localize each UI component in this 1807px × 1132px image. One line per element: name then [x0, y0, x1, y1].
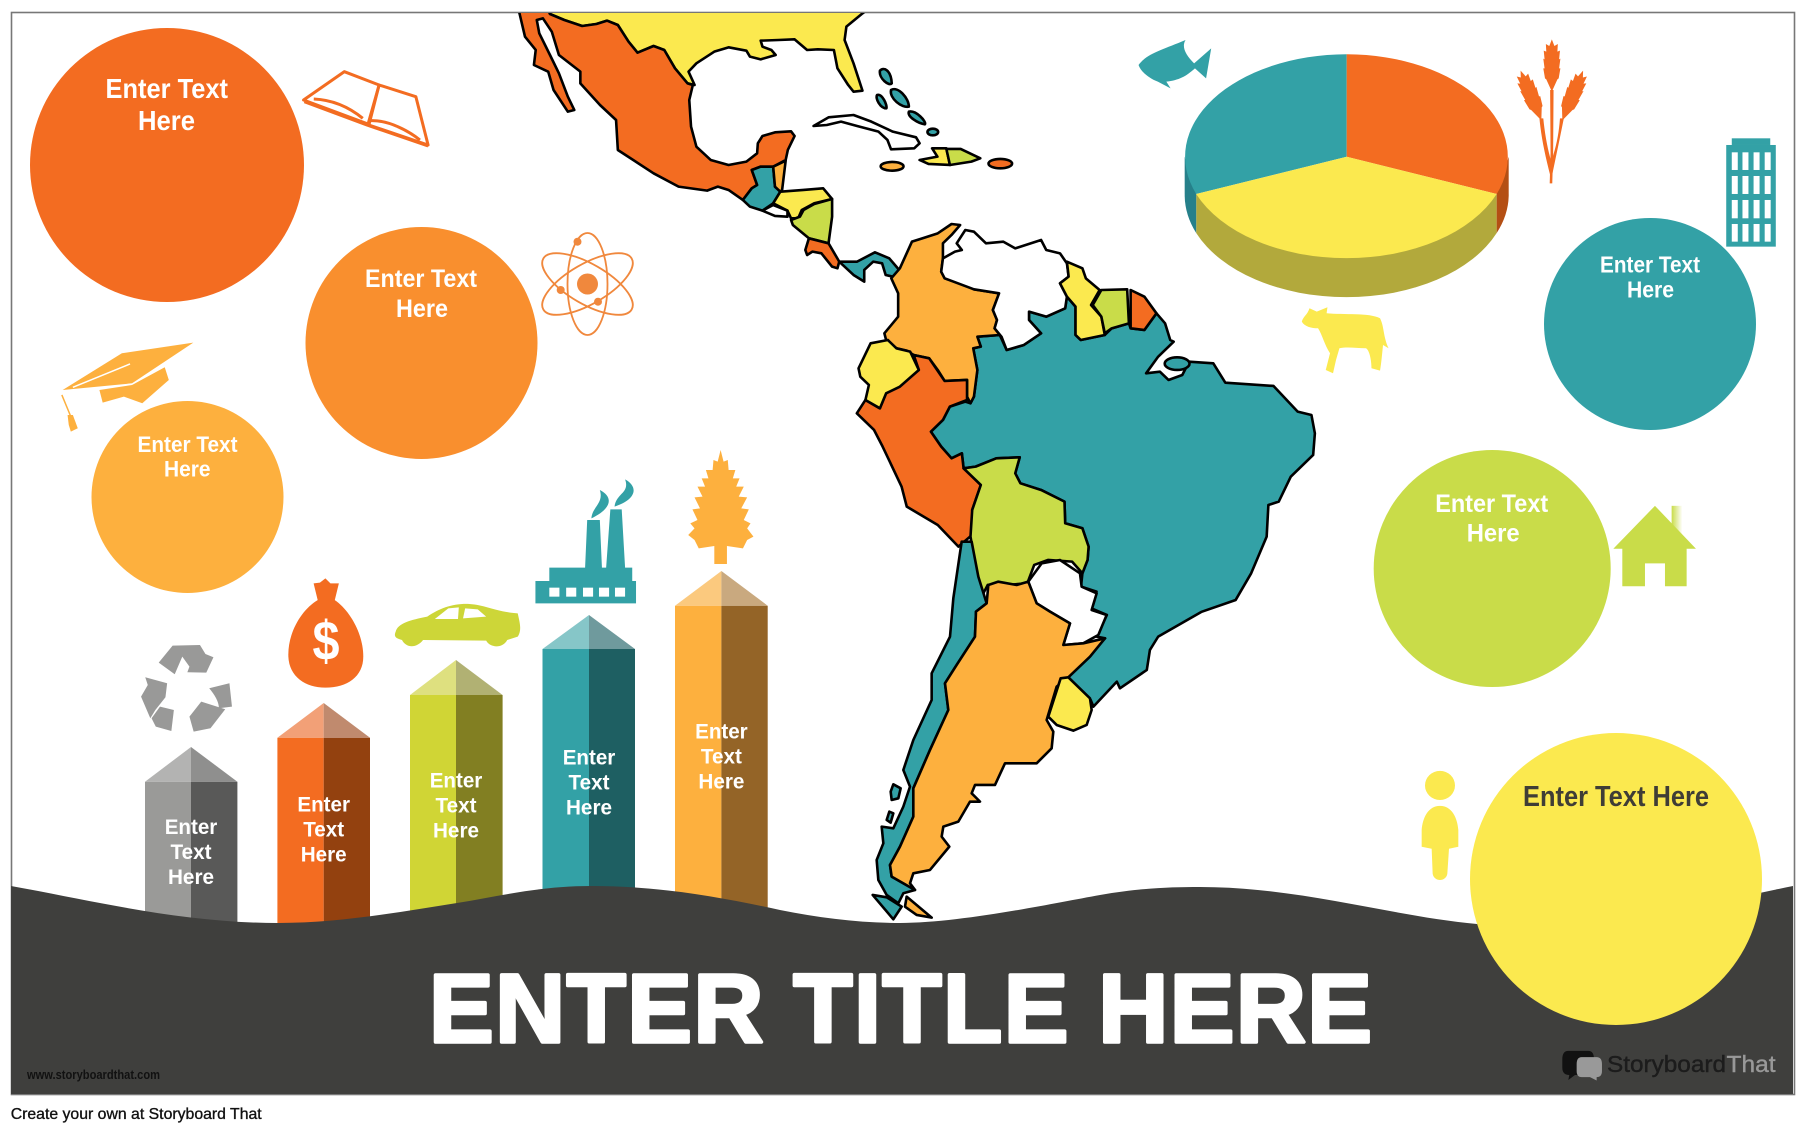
- icon: factory: [535, 479, 636, 603]
- icon: cow: [1302, 307, 1389, 373]
- circle: mid orange: Enter Text: [365, 265, 478, 293]
- circle: lime: [1374, 450, 1611, 687]
- label: grey column: Enter: [165, 816, 217, 839]
- logo wordmark: Storyboard: [1607, 1051, 1726, 1077]
- circle: dark orange: Enter Text: [106, 73, 228, 104]
- title: ENTER TITLE HERE: [429, 954, 1372, 1063]
- pie side: orange: [1497, 157, 1509, 233]
- pie side: teal: [1185, 157, 1196, 233]
- logo wordmark: [1607, 1051, 1776, 1077]
- icon: atom: [533, 233, 642, 335]
- icon: money bag: [288, 578, 363, 688]
- icons in upper right: [1139, 39, 1776, 373]
- column: grey: [145, 747, 237, 942]
- Haiti: [920, 148, 950, 165]
- label: teal column: Enter: [563, 746, 615, 769]
- Chile: [877, 542, 987, 903]
- Dominican Republic: [946, 149, 980, 165]
- circle: yellow: Enter Text Here: [1523, 781, 1709, 813]
- icon: dollar sign: $: [312, 609, 340, 672]
- map of Latin America: [518, 7, 1315, 919]
- Belize: [773, 161, 786, 192]
- label: orange column: Enter: [297, 794, 350, 817]
- Ecuador: [859, 340, 919, 408]
- footer credit: Create your own at Storyboard That: [11, 1106, 262, 1123]
- Guatemala: [743, 167, 780, 211]
- Peru: [857, 355, 981, 547]
- Venezuela: [941, 230, 1069, 350]
- icon: wheat: [1512, 39, 1591, 183]
- circle: yellow: [1470, 733, 1762, 1025]
- Jamaica: [881, 162, 904, 171]
- circle: amber: [92, 401, 284, 593]
- icon: office building: [1726, 138, 1776, 247]
- label: grey column: Text: [170, 841, 212, 864]
- bar chart: five pencil-shaped columns: [145, 571, 768, 942]
- label: orange column: Here: [301, 844, 347, 867]
- El Salvador: [762, 205, 787, 217]
- label: amber column: Text: [701, 745, 742, 768]
- pie slice: orange: [1347, 54, 1508, 194]
- circle: lime: Here: [1467, 520, 1520, 548]
- column: amber: [675, 571, 768, 926]
- pie chart: [1185, 54, 1509, 297]
- Costa Rica: [805, 238, 839, 268]
- Guyana: [1060, 262, 1105, 340]
- logo wordmark: That: [1726, 1051, 1776, 1077]
- label: grey column: [165, 816, 217, 889]
- icon: pine tree: [688, 450, 753, 564]
- pie side: yellow: [1196, 194, 1497, 297]
- circle: amber: Here: [164, 456, 210, 482]
- Nicaragua: [791, 199, 832, 243]
- map: southern cone: [873, 542, 1107, 919]
- Uruguay: [1048, 677, 1092, 731]
- French Guiana: [1131, 290, 1156, 330]
- Panama: [839, 252, 899, 282]
- label: teal column: Text: [568, 771, 610, 794]
- Cuba: [814, 115, 920, 149]
- icon: car: [395, 604, 520, 646]
- icons in upper left: [62, 72, 428, 432]
- icon: graduation cap: [62, 343, 193, 432]
- pie slice: teal: [1185, 54, 1347, 194]
- Brazil: [931, 297, 1315, 707]
- Mexico: [518, 7, 795, 200]
- circle: amber: Enter Text: [138, 432, 238, 457]
- circle: teal: Enter Text: [1600, 252, 1700, 278]
- label: lime column: Enter: [430, 770, 482, 793]
- icon: open book: [304, 72, 428, 146]
- Puerto Rico: [989, 159, 1012, 168]
- Colombia: [884, 224, 1000, 403]
- circle: teal: Here: [1627, 276, 1674, 302]
- label: teal column: Here: [566, 796, 612, 819]
- icons above columns: [141, 450, 753, 732]
- Suriname: [1093, 289, 1129, 333]
- label: amber column: Enter: [695, 720, 748, 743]
- label: teal column: [563, 746, 615, 819]
- circle: mid orange: [306, 227, 538, 459]
- map: Mexico, Central America and Caribbean: [518, 7, 1012, 282]
- label: orange column: [297, 794, 350, 867]
- pie slice: yellow: [1196, 157, 1497, 258]
- Argentina: [890, 582, 1105, 890]
- icon: speech bubbles logo: [1562, 1051, 1602, 1080]
- circle: mid orange: Here: [396, 295, 448, 323]
- column: teal: [542, 615, 635, 909]
- USA: [546, 7, 871, 92]
- label: grey column: Here: [168, 866, 214, 889]
- label: amber column: Here: [698, 770, 744, 793]
- icons lower right: [1422, 506, 1696, 1080]
- Bolivia: [964, 457, 1089, 595]
- icon: fish: [1139, 40, 1211, 88]
- Argentine tip: [905, 897, 932, 918]
- icon: recycle: [141, 645, 232, 732]
- column: lime: [410, 660, 503, 935]
- Bahamas: [877, 69, 938, 135]
- Chilean islands: [887, 784, 901, 823]
- label: lime column: Text: [436, 795, 477, 818]
- website watermark: www.storyboardthat.com: [26, 1068, 160, 1082]
- icon: person: [1422, 771, 1458, 880]
- label: lime column: [430, 770, 482, 843]
- column: orange: [277, 703, 370, 938]
- circle: teal: [1544, 218, 1756, 430]
- label: orange column: Text: [303, 819, 344, 842]
- circle: lime: Enter Text: [1435, 490, 1549, 518]
- label: amber column: [695, 720, 748, 793]
- label: lime column: Here: [433, 820, 479, 843]
- Amazon island: [1165, 357, 1190, 370]
- Honduras: [773, 188, 832, 218]
- icon: house: [1613, 506, 1696, 586]
- dark ground wave: [11, 886, 1793, 1094]
- Tierra del Fuego: [873, 895, 902, 919]
- circle: dark orange: Here: [138, 105, 195, 136]
- column labels: [165, 720, 748, 889]
- map: northern South America: [857, 224, 1315, 707]
- Paraguay: [1028, 560, 1107, 645]
- circle: dark orange: [30, 28, 304, 302]
